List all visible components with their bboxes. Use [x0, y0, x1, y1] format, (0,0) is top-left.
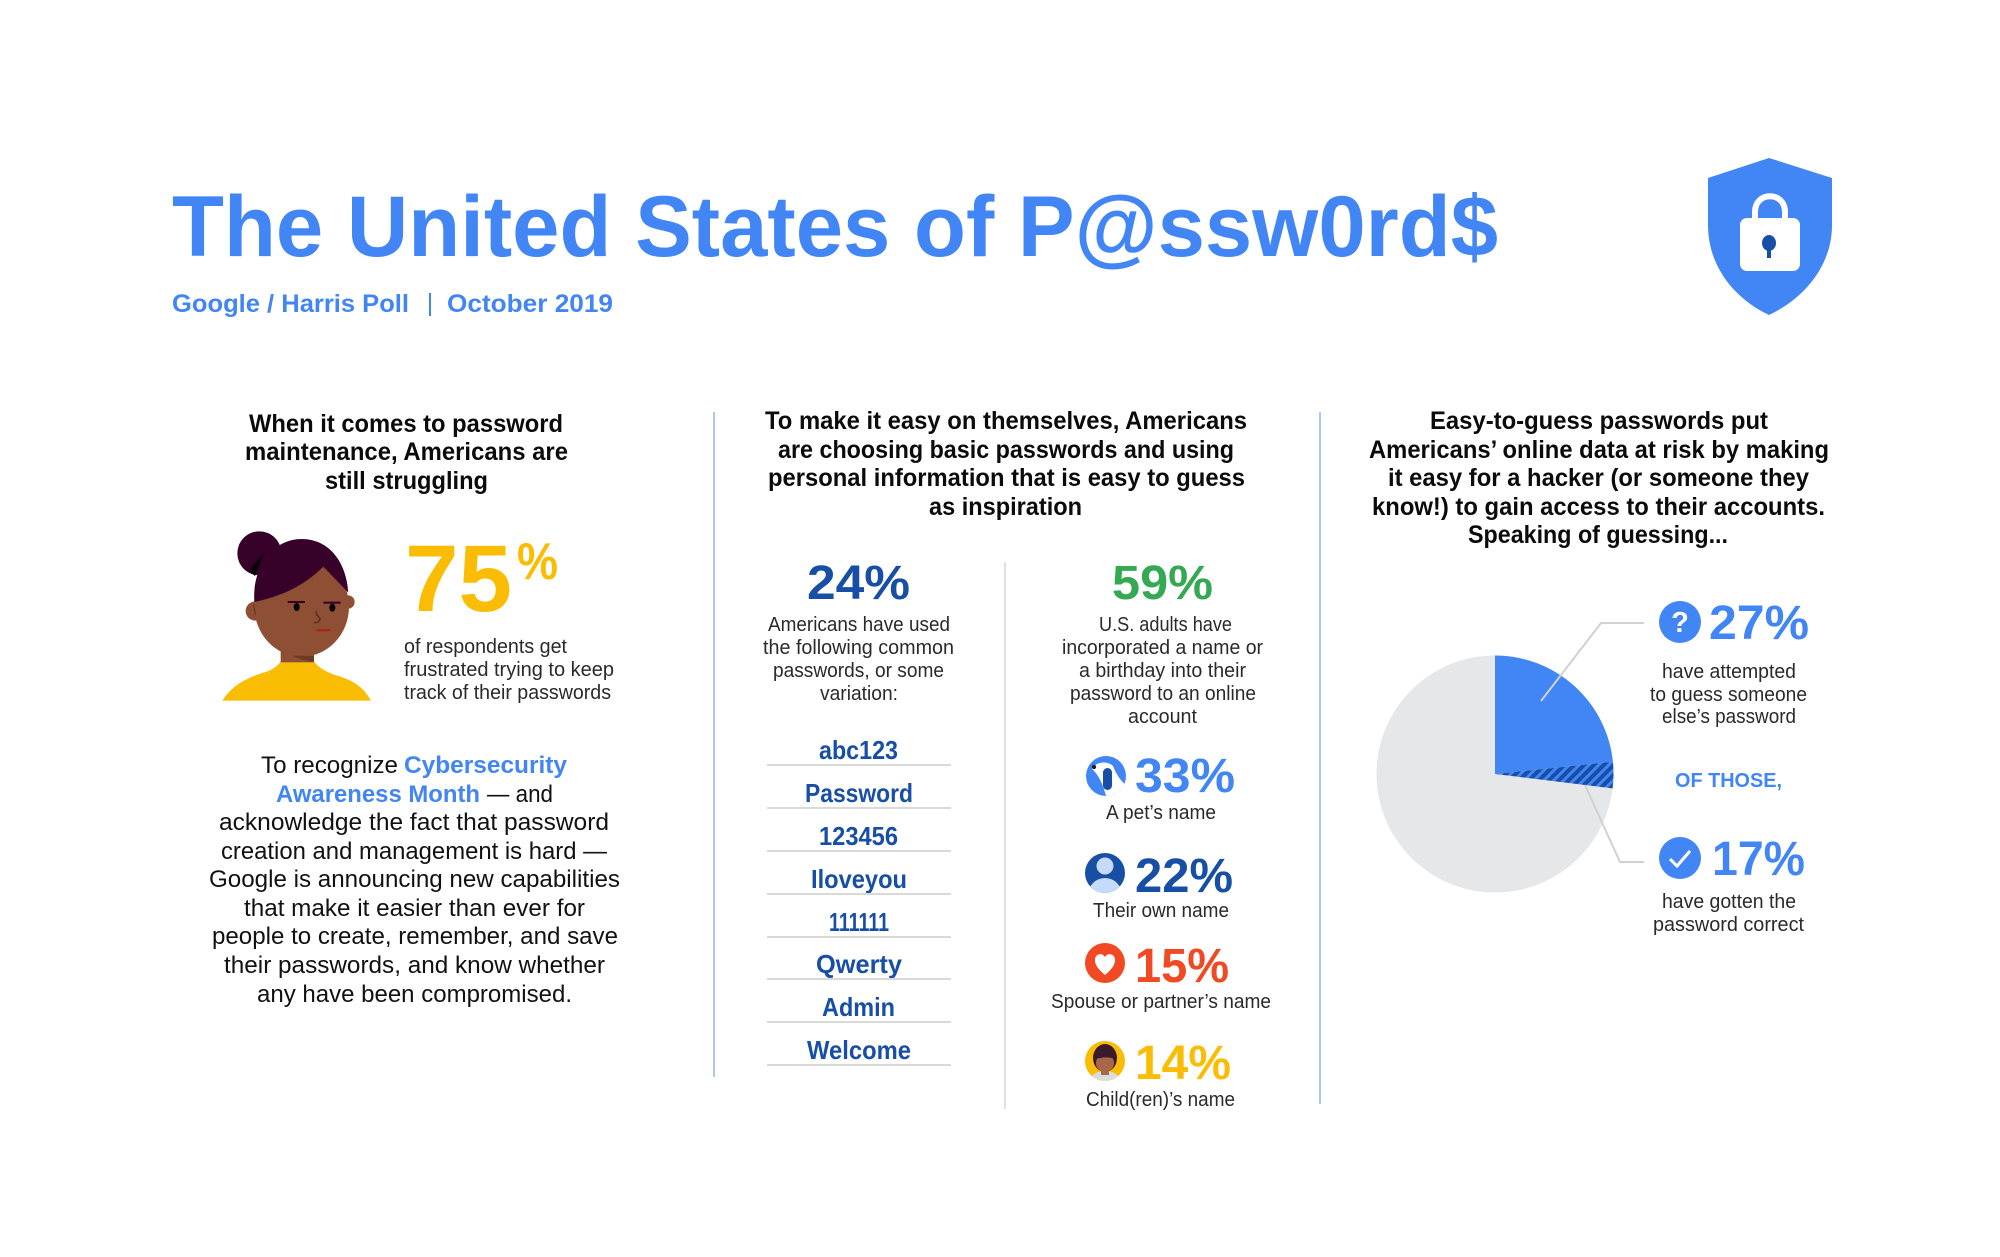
heading: right column: know!) to gain access to their accounts.	[1372, 493, 1825, 521]
stat: 14 percent children's name	[1086, 1037, 1235, 1111]
text: name or birthday intro: U.S. adults have	[1099, 614, 1232, 636]
stat: 24 percent: 24%	[807, 557, 910, 610]
text: frustrated respondents: of respondents get	[404, 636, 567, 658]
text: cybersecurity awareness paragraph	[209, 752, 620, 1008]
stat: 17 percent guessed correctly: have gotten the	[1662, 891, 1796, 913]
icon: security shield with padlock	[1708, 158, 1832, 315]
text: cybersecurity awareness paragraph: any have been compromised.	[257, 981, 572, 1008]
heading: middle column: To make it easy on themselves, Americans	[765, 407, 1247, 435]
label: of those: OF THOSE,	[1675, 770, 1782, 792]
text: name or birthday intro: incorporated a name or	[1062, 637, 1263, 659]
stat: 59 percent: 59%	[1112, 557, 1213, 610]
icon: dog	[1086, 756, 1126, 796]
stat: 15 percent spouse or partner's name	[1051, 940, 1271, 1013]
stat: 75 percent: %	[517, 533, 558, 591]
panel: password maintenance struggles	[209, 410, 620, 1008]
stat: 27 percent attempted to guess: 27%	[1709, 597, 1809, 650]
heading: right column: Americans’ online data at risk by making	[1369, 436, 1829, 464]
list: common passwords	[767, 735, 951, 1066]
stat: 22 percent own name: 22%	[1135, 850, 1233, 903]
text: name or birthday intro	[1062, 614, 1263, 728]
pie chart: 27 percent guessed, 17 percent of those correct	[1376, 623, 1644, 892]
text: frustrated respondents: frustrated trying to keep	[404, 659, 614, 681]
stat: 27 percent attempted to guess	[1650, 597, 1809, 728]
text: cybersecurity awareness paragraph: Awareness Month	[276, 781, 480, 808]
stat: 75 percent	[405, 526, 558, 632]
text: cybersecurity awareness paragraph: acknowledge the fact that password	[219, 809, 609, 836]
text: cybersecurity awareness paragraph: people to create, remember, and save	[212, 923, 618, 950]
stat: 17 percent guessed correctly	[1653, 833, 1805, 936]
stat: 33 percent pet's name	[1106, 750, 1235, 824]
stat: 17 percent guessed correctly: 17%	[1712, 833, 1805, 886]
stat: 22 percent own name	[1093, 850, 1233, 922]
icon: frustrated woman illustration	[222, 531, 371, 701]
heading: right column: Easy-to-guess passwords put	[1430, 407, 1769, 435]
heading: middle column: as inspiration	[929, 493, 1082, 521]
text: cybersecurity awareness paragraph: that make it easier than ever for	[244, 895, 585, 922]
stat: 14 percent children's name: 14%	[1135, 1037, 1231, 1090]
stat: 17 percent guessed correctly: password correct	[1653, 914, 1804, 936]
stat: 33 percent pet's name: A pet’s name	[1106, 802, 1216, 824]
list: common passwords: Password	[805, 778, 913, 808]
stat: 27 percent attempted to guess: have attempted	[1662, 661, 1796, 683]
list: common passwords: Admin	[822, 992, 895, 1022]
stat: 15 percent spouse or partner's name: Spouse or partner’s name	[1051, 991, 1271, 1013]
icon: check mark	[1659, 837, 1701, 879]
icon: heart	[1085, 943, 1125, 983]
icon: child	[1085, 1041, 1125, 1081]
subtitle: source and date: October 2019	[447, 290, 613, 318]
list: common passwords: Iloveyou	[811, 864, 907, 894]
text: name or birthday intro: account	[1128, 706, 1197, 728]
heading: middle column	[765, 407, 1247, 521]
heading: middle column: are choosing basic passwords and using	[778, 436, 1234, 464]
subtitle: source and date	[172, 290, 613, 318]
text: common passwords intro: passwords, or some	[773, 660, 944, 682]
heading: right column: it easy for a hacker (or someone they	[1388, 464, 1809, 492]
heading: right column: Speaking of guessing...	[1468, 521, 1728, 549]
list: common passwords: abc123	[819, 735, 898, 765]
text: cybersecurity awareness paragraph: — and	[487, 781, 553, 808]
text: name or birthday intro: password to an online	[1070, 683, 1256, 705]
panel: guessing passwords	[1369, 407, 1829, 936]
stat: 75 percent: 75	[405, 526, 512, 632]
subtitle: source and date: Google / Harris Poll	[172, 290, 409, 318]
stat: 33 percent pet's name: 33%	[1135, 750, 1235, 803]
heading: left column: When it comes to password	[249, 410, 563, 438]
stat: 15 percent spouse or partner's name: 15%	[1135, 940, 1229, 993]
list: common passwords: Qwerty	[816, 949, 903, 979]
heading: left column: still struggling	[325, 467, 488, 495]
title: The United States of P@ssw0rd$	[172, 179, 1498, 275]
text: cybersecurity awareness paragraph: creation and management is hard —	[221, 838, 607, 865]
text: common passwords intro: variation:	[820, 683, 898, 705]
text: common passwords intro	[763, 614, 954, 705]
text: cybersecurity awareness paragraph: To recognize	[261, 752, 398, 779]
text: frustrated respondents: track of their passwords	[404, 682, 611, 704]
list: common passwords: 123456	[819, 821, 898, 851]
stat: 14 percent children's name: Child(ren)’s name	[1086, 1089, 1235, 1111]
icon: question mark	[1659, 601, 1701, 643]
stat: 27 percent attempted to guess: to guess someone	[1650, 684, 1807, 706]
list: common passwords: 111111	[829, 907, 889, 937]
text: common passwords intro: Americans have used	[768, 614, 950, 636]
icon: question mark: ?	[1671, 607, 1689, 639]
text: common passwords intro: the following common	[763, 637, 954, 659]
text: name or birthday intro: a birthday into their	[1079, 660, 1246, 682]
panel: basic passwords and personal information	[763, 407, 1271, 1111]
heading: middle column: personal information that is easy to guess	[768, 464, 1245, 492]
list: common passwords: Welcome	[807, 1035, 911, 1065]
text: cybersecurity awareness paragraph: their passwords, and know whether	[224, 952, 605, 979]
stat: 27 percent attempted to guess: else’s password	[1662, 706, 1796, 728]
heading: left column: maintenance, Americans are	[245, 438, 568, 466]
text: cybersecurity awareness paragraph: Cybersecurity	[404, 752, 568, 779]
text: frustrated respondents	[404, 636, 614, 704]
heading: right column	[1369, 407, 1829, 549]
text: cybersecurity awareness paragraph: Google is announcing new capabilities	[209, 866, 620, 893]
stat: 22 percent own name: Their own name	[1093, 900, 1229, 922]
icon: person	[1085, 853, 1125, 893]
heading: left column	[245, 410, 568, 495]
